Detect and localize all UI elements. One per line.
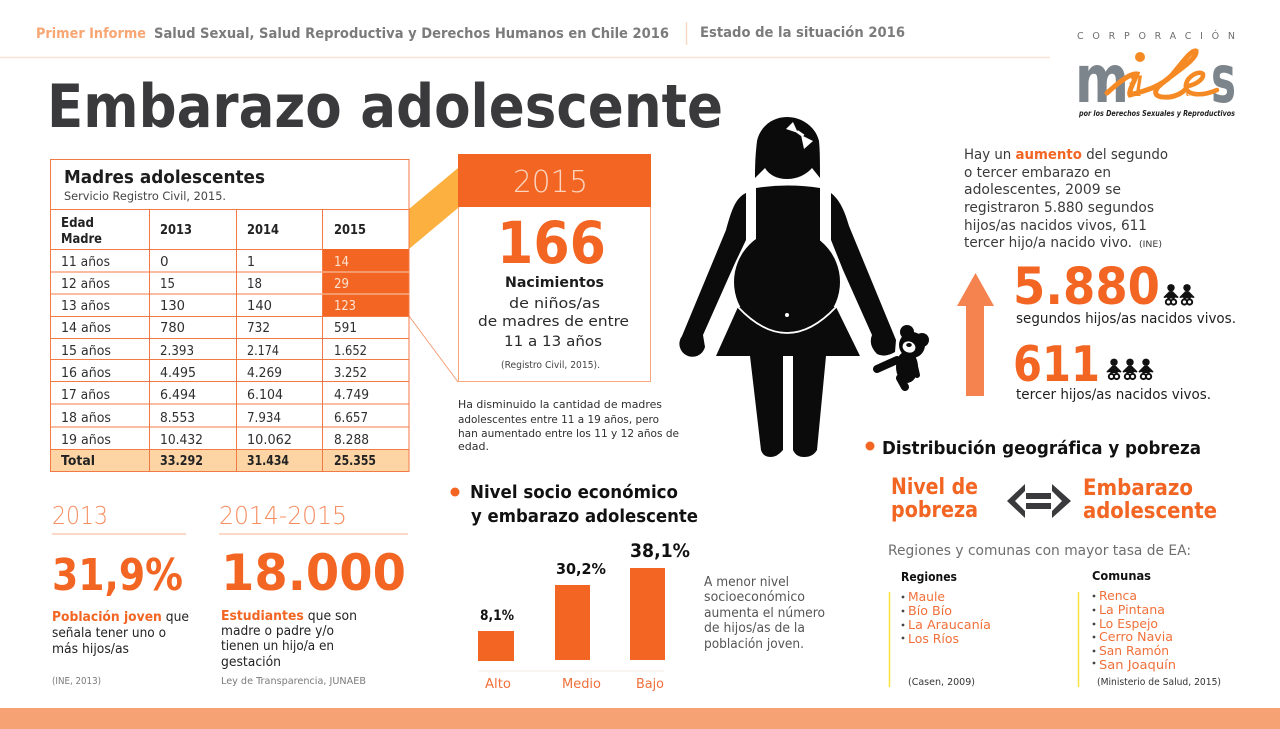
table body rows: 18: [247, 276, 262, 292]
stat: 2014-2015 students: tienen un hijo/a en: [221, 639, 334, 654]
text: socioeconomic note: aumenta el número: [704, 606, 825, 621]
text: increase in second and third pregnancies: registraron 5.880 segundos: [964, 200, 1154, 216]
stat: 2014-2015 students: 18.000: [221, 544, 406, 602]
right arm: [831, 193, 896, 356]
section heading: Nivel socio económico: Nivel socio económico: [470, 482, 678, 503]
text: socioeconomic note: [704, 575, 825, 652]
note below panel: edad.: [458, 440, 489, 453]
table body rows: 780: [160, 320, 185, 336]
table total row: [61, 454, 376, 469]
table body rows: 14 años: [61, 320, 111, 336]
table body rows: 732: [247, 320, 270, 336]
note below panel: han aumentado entre los 11 y 12 años de: [458, 427, 679, 440]
pregnancy label: adolescente: [1083, 499, 1217, 524]
belly outline: [738, 307, 836, 333]
footer band: [0, 708, 1280, 729]
section heading: Nivel socio económico: [450, 482, 698, 527]
table body rows: 10.432: [160, 432, 203, 448]
connector wedge from table to 2015 panel: [409, 168, 458, 382]
text: socioeconomic note: de hijos/as de la: [704, 621, 805, 636]
table body rows: 14: [334, 254, 349, 270]
header bar: [0, 22, 1050, 58]
table body rows: 130: [160, 298, 185, 314]
stat: 611 third children: 611: [1013, 336, 1100, 393]
table body rows: 6.657: [334, 410, 368, 426]
girl silhouette: [679, 117, 929, 457]
stat: 2013 young population: Población joven que: [52, 610, 189, 625]
list: regiones: La Araucanía: [908, 617, 991, 632]
text: socioeconomic note: A menor nivel: [704, 575, 789, 590]
text: increase in second and third pregnancies: adolescentes, 2009 se: [964, 182, 1121, 198]
table body rows: 11 años: [61, 254, 110, 270]
bar chart: socioeconomic level: [478, 540, 690, 692]
hair bow: [786, 122, 813, 149]
panel: 2015 births: [458, 154, 651, 382]
stat: 2014-2015 students: [219, 501, 408, 687]
section: Distribución geográfica y pobreza: Distribución geográfica y pobreza: [882, 438, 1201, 459]
hair and head: [755, 117, 820, 179]
panel description: 11 a 13 años: [504, 334, 602, 350]
stat: 2014-2015 students: madre o padre y/o: [221, 624, 334, 639]
logo: Corporación Miles: m: [1075, 41, 1129, 118]
table body rows: 19 años: [61, 432, 111, 448]
table total row: 25.355: [334, 454, 376, 469]
stat: 5.880 second children: 5.880: [1013, 258, 1160, 317]
table body rows: 8.288: [334, 432, 369, 448]
bar: Alto: Alto: [485, 677, 511, 692]
table total row: Total: [61, 454, 95, 469]
list: comunas: San Ramón: [1099, 643, 1169, 658]
table body rows: 2.174: [247, 343, 279, 359]
table total row: 33.292: [160, 454, 203, 469]
bar: Bajo: Bajo: [636, 677, 664, 692]
table body rows: 16 años: [61, 365, 111, 381]
table body rows: 7.934: [247, 410, 281, 426]
right leg: [793, 356, 826, 457]
list: regiones: Maule: [908, 589, 945, 604]
list: regiones: [890, 570, 991, 688]
logo: Corporación Miles: e: [1186, 88, 1191, 99]
text: increase in second and third pregnancies: tercer hijo/a nacido vivo.: [964, 235, 1132, 251]
table body rows: 1: [247, 254, 255, 270]
panel description: de niños/as: [509, 296, 600, 312]
bar: Medio: [555, 560, 606, 692]
list: regiones: Los Ríos: [908, 631, 959, 646]
stat: 2013 young population: 31,9%: [52, 550, 183, 601]
stat: 5.880 second children: segundos hijos/as nacidos vivos.: [1016, 311, 1236, 327]
table body rows: 140: [247, 298, 272, 314]
table body rows: 6.104: [247, 387, 283, 403]
panel description: (Registro Civil, 2015).: [501, 360, 600, 371]
table body rows: 123: [334, 298, 356, 314]
panel description: [478, 275, 629, 371]
table body rows: 15: [160, 276, 175, 292]
list: comunas: San Joaquín: [1099, 657, 1176, 672]
section: Distribución geográfica y pobreza: [866, 438, 1221, 688]
text: increase in second and third pregnancies: (INE): [1139, 240, 1162, 250]
arrow: increase: [957, 273, 994, 396]
table body rows: 6.494: [160, 387, 196, 403]
list: comunas: (Ministerio de Salud, 2015): [1097, 677, 1221, 688]
logo: Corporación Miles: [1075, 30, 1236, 118]
icon: two babies: [1164, 284, 1194, 305]
table: Madres adolescentes: [50, 160, 409, 472]
text: increase in second and third pregnancies: Hay un aumento del segundo: [964, 147, 1168, 163]
stat: 611 third children: [1013, 336, 1211, 403]
table body rows: 13 años: [61, 298, 110, 314]
left arm: [679, 193, 746, 357]
bar: Alto: [478, 608, 514, 692]
table title: Madres adolescentes: [64, 167, 265, 188]
table body rows: 4.269: [247, 365, 282, 381]
header: report label: Primer Informe: [36, 26, 146, 42]
skirt: [716, 307, 860, 356]
stat: 2013 young population: señala tener uno o: [52, 626, 166, 641]
table body rows: 29: [334, 276, 349, 292]
stat: 2014-2015 students: 2014-2015: [219, 501, 347, 530]
table body rows: 1.652: [334, 343, 367, 359]
list: comunas: La Pintana: [1099, 602, 1165, 617]
table source: Servicio Registro Civil, 2015.: [64, 189, 226, 203]
bar: Bajo: [630, 540, 690, 692]
list: regiones: (Casen, 2009): [908, 677, 975, 688]
header: report name: Salud Sexual, Salud Reproductiva y Derechos Humanos en Chile 2016: [154, 26, 669, 42]
text: socioeconomic note: población joven.: [704, 637, 804, 652]
torso: [756, 186, 820, 250]
table body rows: 591: [334, 320, 357, 336]
table body rows: 2.393: [160, 343, 194, 359]
table header row: 2014: [247, 223, 279, 238]
table body rows: 15 años: [61, 343, 111, 359]
table header row: [61, 216, 366, 247]
title: Embarazo adolescente: [47, 72, 723, 142]
bar: Bajo: 38,1%: [630, 540, 690, 562]
stat: 2014-2015 students: Ley de Transparencia, JUNAEB: [221, 676, 366, 687]
list: regiones: Bío Bío: [908, 603, 952, 618]
pregnancy label: [1083, 476, 1217, 524]
panel description: de madres de entre: [478, 314, 629, 330]
poverty label: [891, 475, 978, 523]
poverty label: Nivel de: [891, 475, 978, 500]
table body rows: 8.553: [160, 410, 195, 426]
big number 166: 166: [497, 209, 606, 277]
stat: 611 third children: tercer hijos/as nacidos vivos.: [1016, 387, 1211, 403]
note below panel: Ha disminuido la cantidad de madres: [458, 398, 662, 411]
table body rows: 0: [160, 254, 169, 270]
stat: 2013 young population: [52, 501, 189, 687]
table body rows: 12 años: [61, 276, 110, 292]
teddy bear: [877, 325, 929, 387]
table body rows: 4.495: [160, 365, 196, 381]
stat: 5.880 second children: [1013, 258, 1236, 327]
poverty label: pobreza: [891, 498, 978, 523]
table header row: Madre: [61, 232, 102, 247]
icon: double arrow equals: [1007, 484, 1071, 518]
table body rows: 3.252: [334, 365, 367, 381]
navel: [785, 313, 789, 317]
table total row: 31.434: [247, 454, 289, 469]
bar: Medio: Medio: [562, 677, 601, 692]
bar: Alto: 8,1%: [480, 608, 514, 624]
list: comunas: Comunas: [1092, 569, 1151, 583]
table body rows: 18 años: [61, 410, 111, 426]
logo: Corporación Miles: s: [1211, 41, 1236, 118]
logo: Corporación Miles: por los Derechos Sexuales y Reproductivos: [1078, 109, 1235, 118]
table header row: Edad: [61, 216, 94, 231]
icon: three babies: [1106, 359, 1154, 379]
stat: 2013 young population: 2013: [52, 501, 108, 530]
note below panel: [458, 398, 679, 453]
left leg: [750, 356, 783, 457]
pregnancy label: Embarazo: [1083, 476, 1193, 501]
stat: 2013 young population: más hijos/as: [52, 642, 129, 657]
table body rows: 4.749: [334, 387, 369, 403]
bar: Medio: 30,2%: [556, 560, 606, 578]
table body rows: [61, 254, 369, 448]
section heading: Nivel socio económico: y embarazo adolescente: [471, 506, 698, 527]
table body rows: 17 años: [61, 387, 110, 403]
list: regiones: Regiones: [901, 570, 957, 584]
stat: 2014-2015 students: Estudiantes que son: [221, 609, 357, 624]
text: increase in second and third pregnancies: [964, 147, 1168, 251]
text: increase in second and third pregnancies: o tercer embarazo en: [964, 165, 1111, 181]
header: status: Estado de la situación 2016: [700, 25, 905, 41]
list: comunas: Renca: [1099, 588, 1137, 603]
stat: 2013 young population: (INE, 2013): [52, 676, 101, 687]
panel year: 2015: [513, 165, 588, 200]
list: comunas: Lo Espejo: [1099, 616, 1158, 631]
belly: [734, 229, 840, 335]
stat: 2014-2015 students: gestación: [221, 655, 281, 670]
logo: Corporación Miles: CORPORACIÓN: [1077, 30, 1235, 42]
text: increase in second and third pregnancies: hijos/as nacidos vivos, 611: [964, 218, 1147, 234]
table body rows: 10.062: [247, 432, 292, 448]
subtitle: Regiones y comunas con mayor tasa de EA:: [888, 543, 1191, 559]
table header row: 2015: [334, 223, 366, 238]
table header row: 2013: [160, 223, 192, 238]
note below panel: adolescentes entre 11 a 19 años, pero: [458, 413, 659, 426]
logo: Corporación Miles: il: [1128, 70, 1143, 103]
text: socioeconomic note: socioeconómico: [704, 590, 805, 605]
list: comunas: Cerro Navia: [1099, 629, 1173, 644]
panel description: Nacimientos: [505, 275, 604, 291]
list: comunas: [1078, 569, 1221, 688]
